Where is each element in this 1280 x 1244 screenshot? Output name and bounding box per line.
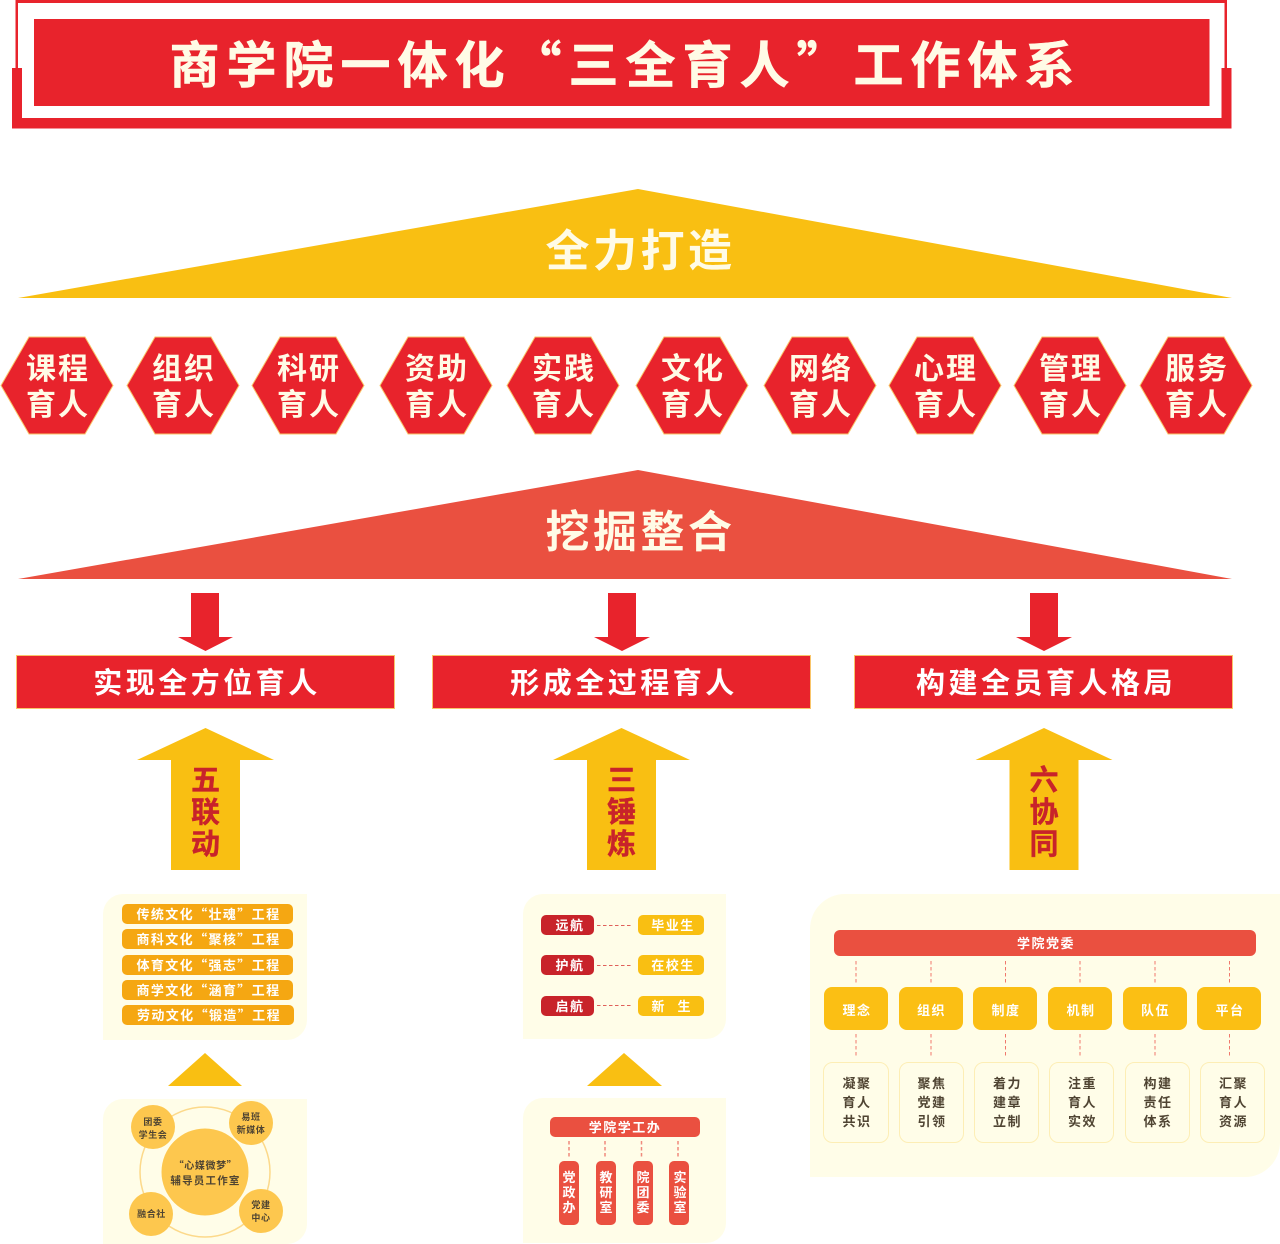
heading bar: 实现全方位育人: 实现全方位育人 bbox=[93, 660, 321, 702]
column: 党政办: 政 bbox=[562, 1182, 576, 1201]
column: 平台 bbox=[1197, 987, 1264, 1142]
arrow: 六协同 bbox=[976, 728, 1112, 870]
panel: 三航 bbox=[523, 894, 726, 1039]
column: 制度: 立制 bbox=[993, 1111, 1022, 1130]
arrow: 六协同: 协 bbox=[1029, 789, 1059, 831]
column: 组织: 引领 bbox=[917, 1111, 947, 1130]
node: 团委学生会: 学生会 bbox=[139, 1128, 167, 1141]
hexagon: 资助育人: 资助 bbox=[405, 344, 469, 388]
title banner bbox=[12, 0, 1232, 128]
item: 锻造: 劳动文化“锻造”工程 bbox=[137, 1005, 281, 1024]
column: 组织: 党建 bbox=[917, 1092, 947, 1111]
column: 实验室: 验 bbox=[673, 1182, 687, 1201]
row: 启航 新生: 启航 bbox=[555, 996, 585, 1015]
column: 队伍: 队伍 bbox=[1141, 1000, 1170, 1019]
column: 教研室: 教 bbox=[599, 1167, 613, 1186]
column: 制度: 建章 bbox=[993, 1092, 1022, 1111]
column: 教研室: 研 bbox=[599, 1182, 613, 1201]
hexagon: 心理育人 bbox=[889, 337, 1001, 434]
node: 团委学生会: 团委 bbox=[143, 1115, 163, 1128]
column: 机制: 实效 bbox=[1068, 1111, 1097, 1130]
banner: 挖掘整合 bbox=[18, 470, 1232, 579]
column: 院团委: 委 bbox=[636, 1197, 650, 1216]
hexagon: 科研育人: 科研 bbox=[277, 344, 341, 388]
hexagon row bbox=[1, 337, 1252, 434]
item: 壮魂: 传统文化“壮魂”工程 bbox=[136, 904, 281, 923]
hexagon: 心理育人: 心理 bbox=[914, 344, 978, 388]
column: 平台: 汇聚 bbox=[1219, 1073, 1248, 1092]
column: 教研室: 室 bbox=[599, 1197, 613, 1216]
hexagon: 管理育人: 育人 bbox=[1039, 380, 1103, 424]
node: 易班新媒体 bbox=[229, 1101, 273, 1145]
header: 学院党委 bbox=[834, 930, 1256, 956]
column: 平台: 资源 bbox=[1219, 1111, 1248, 1130]
node: 易班新媒体: 新媒体 bbox=[237, 1123, 265, 1136]
arrow: down to 全过程 bbox=[594, 593, 650, 651]
arrow: 五联动: 联 bbox=[191, 789, 220, 831]
hexagon: 实践育人 bbox=[507, 337, 619, 434]
column: 理念: 育人 bbox=[842, 1092, 872, 1111]
column: 理念 bbox=[824, 987, 888, 1142]
hexagon: 心理育人: 育人 bbox=[914, 380, 978, 424]
column: 实验室 bbox=[669, 1161, 689, 1225]
row: 启航 新生 bbox=[541, 996, 704, 1016]
arrow: 六协同: 六 bbox=[1029, 757, 1059, 799]
hexagon: 组织育人: 组织 bbox=[152, 344, 216, 388]
panel: 学院党委 bbox=[810, 894, 1280, 1177]
column: 制度: 着力 bbox=[993, 1073, 1022, 1092]
hexagon: 文化育人 bbox=[636, 337, 748, 434]
hexagon: 管理育人 bbox=[1014, 337, 1126, 434]
banner: 全力打造: 全力打造 bbox=[546, 215, 736, 279]
banner: 挖掘整合: 挖掘整合 bbox=[546, 496, 736, 560]
row: 远航 毕业生: 毕业生 bbox=[651, 915, 695, 934]
column: 制度: 制度 bbox=[991, 1000, 1021, 1019]
row: 远航 毕业生: 远航 bbox=[555, 915, 585, 934]
node: 融合社: 融合社 bbox=[137, 1207, 166, 1220]
column: 组织 bbox=[899, 987, 964, 1142]
arrow: 五联动 bbox=[137, 728, 274, 870]
column: 教研室 bbox=[596, 1161, 616, 1225]
column: 组织: 聚焦 bbox=[917, 1073, 947, 1092]
hexagon: 资助育人: 育人 bbox=[405, 380, 469, 424]
hexagon: 管理育人: 管理 bbox=[1039, 344, 1103, 388]
hexagon: 组织育人 bbox=[127, 337, 239, 434]
item: 强志: 体育文化“强志”工程 bbox=[136, 955, 281, 974]
header: 学院党委: 学院党委 bbox=[1017, 933, 1075, 952]
hexagon: 组织育人: 育人 bbox=[152, 380, 216, 424]
hexagon: 网络育人 bbox=[764, 337, 876, 434]
header: 学院学工办: 学院学工办 bbox=[589, 1117, 661, 1136]
arrow: 三锤炼: 三 bbox=[607, 757, 636, 799]
column: 队伍: 体系 bbox=[1143, 1111, 1173, 1130]
hexagon: 文化育人: 文化 bbox=[661, 344, 725, 388]
node: 融合社 bbox=[129, 1192, 173, 1236]
node: 易班新媒体: 易班 bbox=[241, 1110, 261, 1123]
column: 院团委 bbox=[633, 1161, 653, 1225]
column: 组织: 组织 bbox=[917, 1000, 946, 1019]
hexagon: 课程育人 bbox=[1, 337, 113, 434]
heading bar: 构建全员育人格局 bbox=[854, 656, 1232, 708]
panel: 五大工程 bbox=[103, 894, 307, 1040]
hexagon: 网络育人: 网络 bbox=[789, 344, 853, 388]
column: 党政办: 党 bbox=[562, 1167, 576, 1186]
arrow: down to 全员 bbox=[1016, 593, 1072, 651]
center circle bbox=[162, 1128, 248, 1216]
hexagon: 课程育人: 课程 bbox=[26, 344, 90, 388]
row: 启航 新生: 新 生 bbox=[651, 996, 691, 1015]
arrow: 三锤炼: 炼 bbox=[607, 821, 636, 863]
hexagon: 科研育人 bbox=[252, 337, 364, 434]
heading bar: 构建全员育人格局: 构建全员育人格局 bbox=[916, 660, 1176, 702]
node: 党建中心: 中心 bbox=[251, 1211, 271, 1224]
hexagon: 实践育人: 实践 bbox=[532, 344, 596, 388]
hexagon: 课程育人: 育人 bbox=[26, 380, 90, 424]
header: 学院学工办 bbox=[550, 1117, 700, 1137]
panel: 心媒微梦 diagram bbox=[103, 1099, 307, 1244]
arrow: 五联动: 动 bbox=[191, 821, 220, 863]
column: 理念: 共识 bbox=[842, 1111, 872, 1130]
column: 队伍: 责任 bbox=[1143, 1092, 1173, 1111]
column: 院团委: 院 bbox=[636, 1167, 650, 1186]
node: 党建中心: 党建 bbox=[251, 1198, 271, 1211]
column: 院团委: 团 bbox=[636, 1182, 650, 1201]
row: 护航 在校生: 在校生 bbox=[651, 955, 695, 974]
hexagon: 网络育人: 育人 bbox=[789, 380, 853, 424]
arrow: 五联动: 五 bbox=[191, 757, 220, 799]
heading bar: 形成全过程育人: 形成全过程育人 bbox=[510, 660, 738, 702]
center circle: “心媒微梦” bbox=[174, 1157, 237, 1172]
triangle: middle connector bbox=[587, 1053, 662, 1086]
column: 党政办: 办 bbox=[562, 1197, 576, 1216]
center circle: 辅导员工作室 bbox=[170, 1173, 241, 1188]
column: 实验室: 室 bbox=[673, 1197, 687, 1216]
column: 理念: 凝聚 bbox=[842, 1073, 872, 1092]
hexagon: 实践育人: 育人 bbox=[532, 380, 596, 424]
column: 实验室: 实 bbox=[673, 1167, 687, 1186]
column: 队伍 bbox=[1123, 987, 1190, 1142]
column: 平台: 平台 bbox=[1215, 1000, 1245, 1019]
node: 党建中心 bbox=[239, 1189, 283, 1233]
triangle: left connector bbox=[168, 1053, 242, 1086]
column: 党政办 bbox=[559, 1161, 579, 1225]
hexagon: 文化育人: 育人 bbox=[661, 380, 725, 424]
hexagon: 科研育人: 育人 bbox=[277, 380, 341, 424]
arrow: 六协同: 同 bbox=[1029, 821, 1059, 863]
column: 机制: 育人 bbox=[1068, 1092, 1097, 1111]
heading bar: 形成全过程育人 bbox=[432, 656, 810, 708]
column: 机制 bbox=[1048, 987, 1114, 1142]
hexagon: 服务育人 bbox=[1140, 337, 1252, 434]
item: 聚核: 商科文化“聚核”工程 bbox=[136, 929, 281, 948]
item: 涵育: 商学文化“涵育”工程 bbox=[136, 980, 281, 999]
row: 护航 在校生: 护航 bbox=[555, 955, 585, 974]
arrow: down to 全方位 bbox=[178, 593, 233, 651]
arrow: 三锤炼: 锤 bbox=[607, 789, 636, 831]
row: 护航 在校生 bbox=[541, 955, 704, 975]
column: 制度 bbox=[973, 987, 1038, 1142]
hexagon: 服务育人: 育人 bbox=[1165, 380, 1229, 424]
column: 队伍: 构建 bbox=[1143, 1073, 1173, 1092]
node: 团委学生会 bbox=[131, 1105, 175, 1149]
banner: 全力打造 bbox=[18, 189, 1232, 298]
panel: 学院学工办 bbox=[523, 1098, 726, 1243]
title banner: 商学院一体化“三全育人”工作体系 bbox=[170, 26, 1082, 98]
column: 平台: 育人 bbox=[1219, 1092, 1248, 1111]
hexagon: 服务育人: 服务 bbox=[1165, 344, 1229, 388]
heading bar: 实现全方位育人 bbox=[16, 656, 394, 708]
column: 机制: 机制 bbox=[1066, 1000, 1096, 1019]
row: 远航 毕业生 bbox=[541, 915, 704, 935]
column: 理念: 理念 bbox=[842, 1000, 872, 1019]
hexagon: 资助育人 bbox=[380, 337, 492, 434]
arrow: 三锤炼 bbox=[553, 728, 690, 870]
column: 机制: 注重 bbox=[1068, 1073, 1097, 1092]
